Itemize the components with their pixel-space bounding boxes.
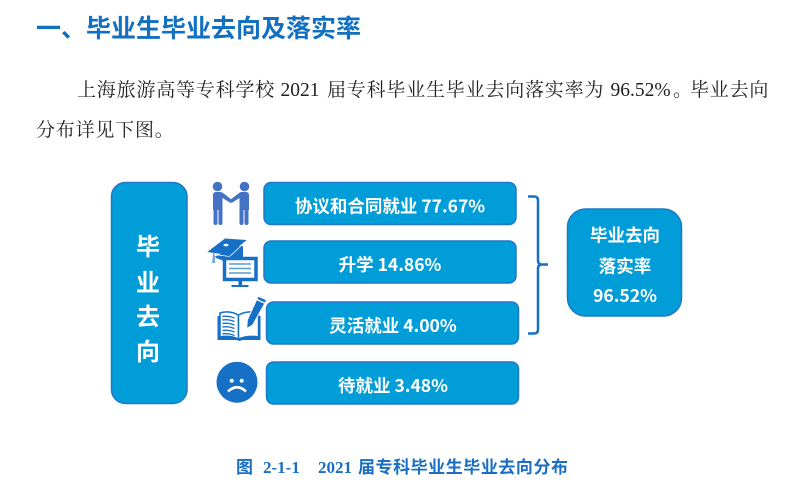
panel: overall placement rate: 毕业去向 (590, 222, 660, 248)
bar: flexible employment: 灵活就业 4.00% (329, 313, 457, 338)
bar: awaiting employment: 待就业 3.48% (338, 373, 448, 398)
icon: handshake (213, 182, 249, 225)
panel: graduate destinations label: 向 (136, 332, 160, 367)
intro paragraph: 分布详见下图。 (36, 119, 175, 141)
intro paragraph: 届专科毕业生毕业去向落实率为 (327, 79, 604, 101)
bar: flexible employment (266, 302, 518, 344)
intro paragraph (36, 79, 769, 141)
title: 一、毕业生毕业去向及落实率 (36, 9, 361, 45)
panel: graduate destinations label: 业 (136, 263, 160, 298)
intro paragraph: 上海旅游高等专科学校 (77, 79, 275, 101)
figure caption: 2-1-1 (263, 458, 300, 477)
bracket (528, 196, 548, 334)
bar: further study: 升学 14.86% (339, 252, 442, 277)
panel: overall placement rate (568, 209, 682, 316)
figure caption: 2021 (318, 458, 352, 477)
icon: sad face (216, 362, 258, 403)
panel: graduate destinations label: 去 (136, 297, 160, 332)
figure caption: 届专科毕业生毕业去向分布 (358, 453, 568, 478)
intro paragraph: 毕业去向 (690, 79, 769, 101)
bar: contract employment (264, 182, 516, 224)
intro paragraph: 2021 (280, 80, 320, 101)
panel: overall placement rate: 落实率 (599, 254, 651, 278)
bar: contract employment: 协议和合同就业 77.67% (295, 194, 485, 218)
bar: awaiting employment (266, 362, 518, 404)
icon: open book and pencil (218, 296, 267, 341)
panel: overall placement rate: 96.52% (593, 283, 657, 308)
panel: graduate destinations label (112, 182, 187, 404)
figure caption: 图 (236, 453, 253, 478)
intro paragraph: 96.52% (610, 80, 671, 101)
bar: further study (264, 241, 516, 283)
intro paragraph: 。 (673, 80, 692, 101)
icon: graduation cap and monitor (207, 238, 256, 287)
panel: graduate destinations label: 毕 (136, 227, 160, 262)
figure caption (236, 453, 568, 478)
